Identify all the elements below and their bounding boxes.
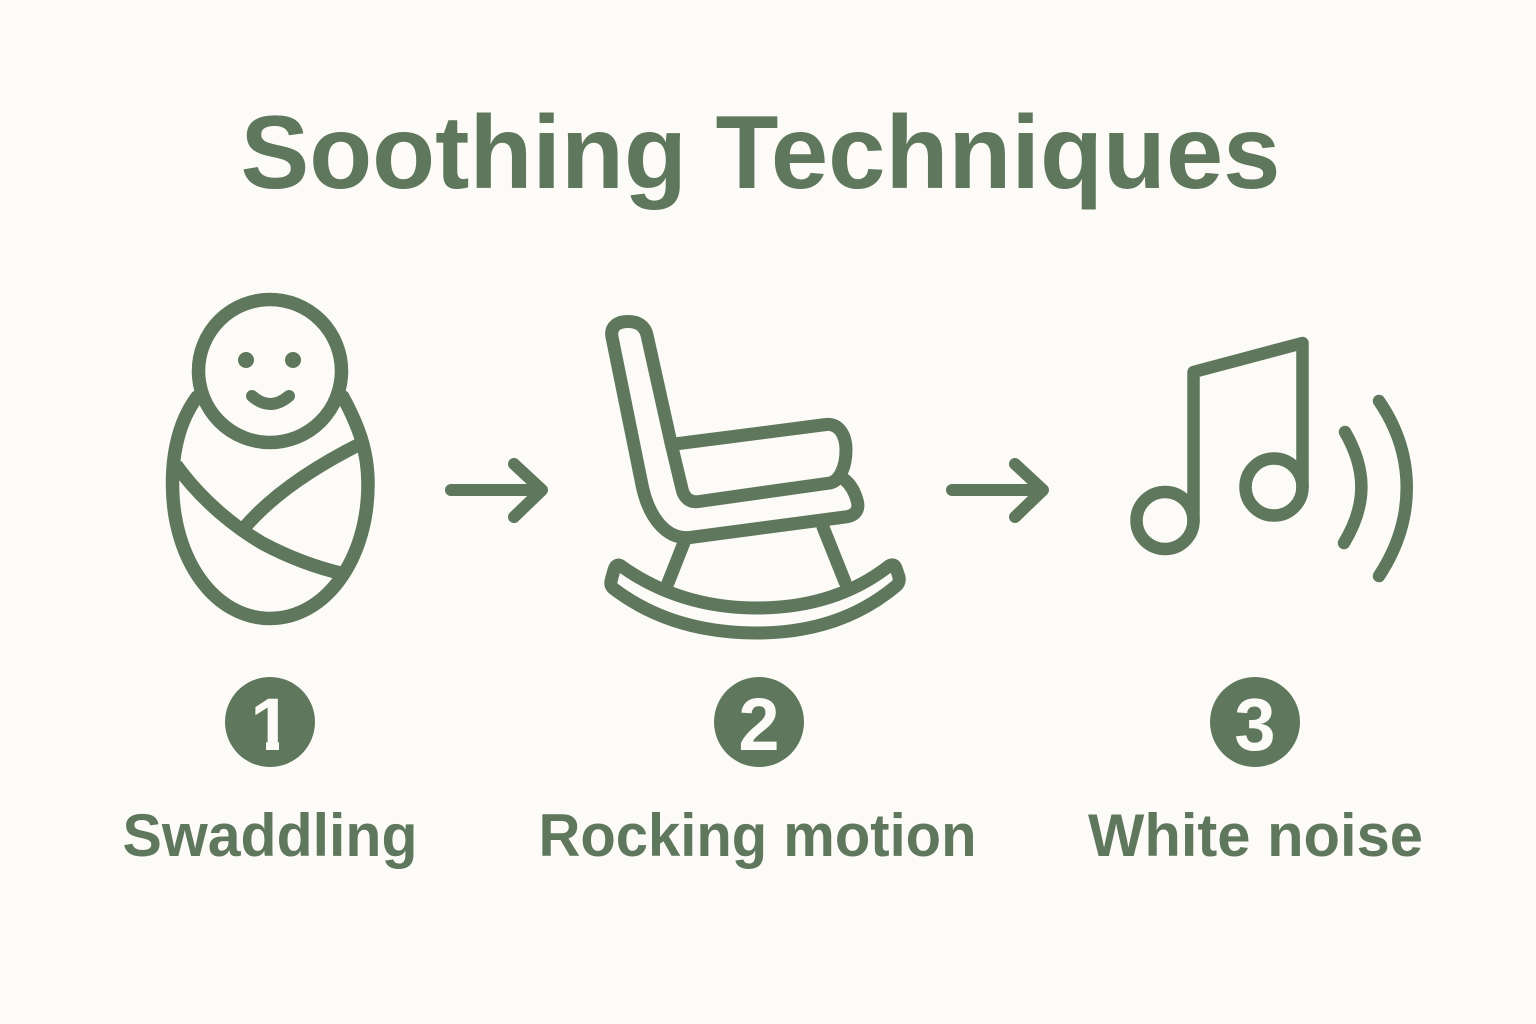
icon: rocking chair	[611, 322, 899, 633]
step 3 badge: 3	[1234, 683, 1276, 766]
label: White noise: White noise	[1088, 802, 1423, 869]
arrow: swaddling to rocking	[451, 464, 542, 517]
step 1 badge: 1	[250, 683, 292, 766]
label: Swaddling: Swaddling	[122, 802, 418, 869]
step 3 badge	[1210, 677, 1300, 767]
step 2 badge	[714, 677, 804, 767]
step 1 badge	[225, 677, 315, 767]
arrow: rocking to white noise	[952, 464, 1043, 517]
step 2 badge: 2	[738, 683, 780, 766]
title: Soothing Techniques	[240, 95, 1280, 211]
icon: swaddled baby	[172, 300, 368, 618]
icon: music note with sound waves	[1136, 343, 1407, 576]
label: Rocking motion: Rocking motion	[538, 802, 976, 869]
